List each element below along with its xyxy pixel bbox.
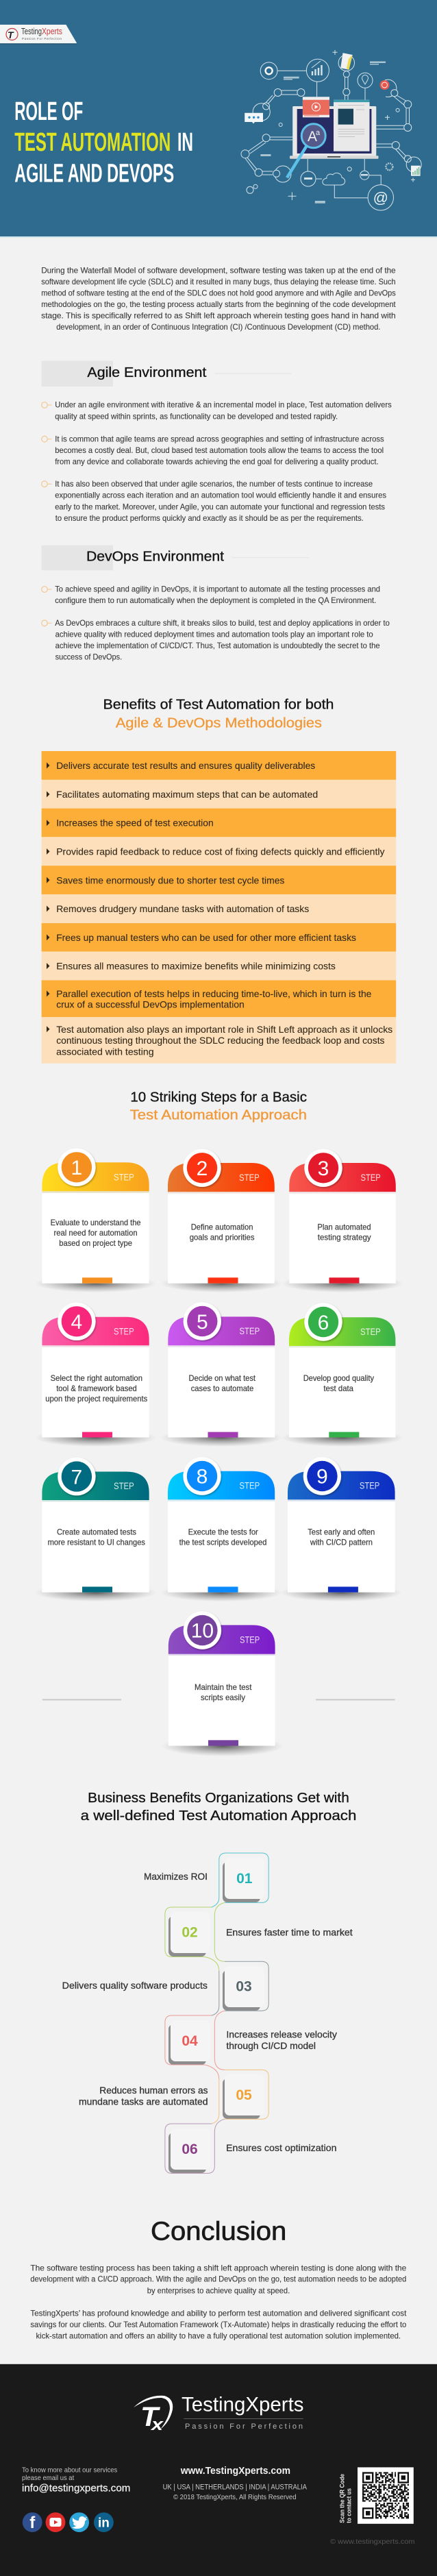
intro text: During the Waterfall Model of software development, software testing was taken up at the end of the [41,266,396,275]
step card 10: Maintain the test [195,1682,252,1692]
step card 3: testing strategy [318,1233,371,1242]
title: ROLE OF [14,97,83,126]
step card 8: 8 [197,1466,208,1488]
benefit 05: Reduces human errors as [99,2085,208,2096]
heading: business benefits: a well-defined Test Automation Approach [81,1808,356,1824]
panel: footer [0,2364,437,2576]
benefit 05: 05 [236,2087,252,2103]
row 6: Removes drudgery mundane tasks with automation of tasks [56,903,309,914]
benefit 06 [165,2119,337,2173]
heading: 10 steps: 10 Striking Steps for a Basic [130,1089,307,1105]
step card 9: Test early and often [308,1528,375,1537]
logo banner: Testing [21,26,42,36]
icon: facebook: f [29,2514,36,2532]
panel: business benefits ladder [62,1853,353,2173]
step card 4 [34,1303,156,1447]
benefit 05 [79,2070,269,2124]
conclusion paragraph 2: kick-start automation and offers an ability to have a fully operational test automation solution implemented. [36,2331,401,2341]
step card 7 [34,1458,156,1602]
row 5 [42,866,396,894]
bullet: agile 3: to ensure the product performs quickly and exactly as it should be as per the requirements. [55,513,364,523]
step card 2: 2 [197,1157,208,1180]
magnifier: a [316,129,321,137]
website and offices: www.TestingXperts.com [180,2466,290,2477]
bullet: devops 1: configure them to run automatically when the deployment is completed in the QA Environment. [55,596,376,605]
conclusion paragraph 1 [30,2263,407,2295]
footer logo: x [149,2416,164,2434]
row 10 [42,1017,396,1064]
step card 6 [282,1303,403,1447]
step card 2: STEP [239,1172,260,1183]
row 7: Frees up manual testers who can be used for other more efficient tasks [56,932,356,943]
row 1 [42,751,396,780]
benefit 03: Delivers quality software products [62,1980,208,1991]
document [334,100,370,151]
title: IN [177,128,193,157]
bullet: devops 2: success of DevOps. [55,652,122,662]
row 8: Ensures all measures to maximize benefits while minimizing costs [56,961,336,972]
bullet: agile 2 [42,434,384,466]
step card 8 [160,1457,282,1602]
heading: Agile Environment: Agile Environment [87,365,207,380]
bullet: agile 3 [42,479,386,523]
benefit 03: 03 [236,1979,252,1994]
step card 4: tool & framework based [56,1384,137,1393]
step card 8: Execute the tests for [188,1528,258,1537]
step card 3 [282,1149,403,1292]
step card 7: 7 [71,1466,82,1488]
row 2: Facilitates automating maximum steps that can be automated [56,789,318,800]
qr code [358,2467,414,2524]
step card 5: cases to automate [191,1384,254,1393]
heading: benefits: Agile & DevOps Methodologies [116,715,322,731]
row 10: associated with testing [56,1046,154,1057]
step card 7: more resistant to UI changes [48,1538,145,1547]
illustration: automation laptop network: @ [373,189,388,206]
step card 2: Define automation [191,1223,253,1232]
heading: 10 steps [130,1089,307,1123]
side rule: right [316,1699,395,1700]
website and offices: © 2018 TestingXperts, All Rights Reserved [173,2494,296,2501]
footer logo: Passion For Perfection [185,2422,303,2431]
step card 8: the test scripts developed [179,1538,266,1547]
contact text: please email us at [22,2474,74,2482]
conclusion paragraph 2: TestingXperts’ has profound knowledge and ability to perform test automation and delivered significant cost [30,2308,407,2318]
step card 4: STEP [114,1325,134,1336]
benefit 01: 01 [236,1871,253,1887]
intro text: development, in an order of Continuous Integration (CI) /Continuous Development (CD) method. [56,322,380,332]
contact text [22,2466,130,2494]
heading: Agile Environment [41,361,291,387]
step card 7: Create automated tests [57,1528,136,1537]
footer logo [134,2393,304,2434]
intro text: methodologies on the go, the testing process actually starts from the beginning of the code development [41,299,396,309]
magnifier [287,124,325,177]
row 4 [42,837,396,866]
step card 5: Decide on what test [189,1373,256,1383]
bullet: devops 1 [42,585,380,605]
step card 5: STEP [239,1325,260,1336]
step card 7: STEP [114,1480,134,1491]
heading: DevOps Environment: DevOps Environment [86,548,224,564]
step card 2: goals and priorities [190,1233,255,1242]
footer logo: TestingXperts [182,2393,304,2416]
title: AGILE AND DEVOPS [14,160,174,188]
bullet: agile 3: early to the market. Moreover, under Agile, you can automate your functional and regression tests [55,502,385,511]
step card 1: real need for automation [53,1228,138,1238]
contact text: info@testingxperts.com [22,2482,130,2494]
step card 10: 10 [191,1620,214,1643]
panel: hero header [0,0,437,238]
magnifier: A [308,129,317,145]
qr caption: Scan the QR Code [338,2474,345,2523]
step card 1 [34,1149,156,1292]
step card 10 [162,1611,284,1756]
row 6 [42,894,396,923]
icon: twitter [69,2512,89,2532]
step card 9: STEP [360,1480,379,1491]
laptop [290,106,378,159]
heading: business benefits [81,1790,356,1824]
step card 5: 5 [197,1311,208,1334]
benefit 02 [165,1902,353,1971]
benefit 04: through CI/CD model [226,2040,316,2051]
bullet: agile 3: It has also been observed that under agile scenarios, the number of tests continue to increase [55,479,373,489]
heading: benefits: Benefits of Test Automation for both [103,696,334,713]
row 2 [42,780,396,809]
row 10: Test automation also plays an important role in Shift Left approach as it unlocks [56,1024,392,1035]
illustration: automation laptop network [241,50,421,210]
step card 2 [160,1149,282,1292]
icon: linkedin [94,2512,114,2532]
logo banner: T [8,29,14,40]
logo banner [0,25,77,45]
bullet: devops 2: As DevOps embraces a culture shift, it breaks silos to build, test and deploy applications in order to [55,618,390,628]
benefit 04 [165,2011,337,2079]
benefit 04: Increases release velocity [226,2028,337,2039]
intro text: stage. This is specifically referred to as Shift left approach wherein testing goes hand in hand with [41,311,396,321]
qr caption: to contact us [345,2488,352,2523]
bullet: agile 3: exponentially across each iteration and an automation tool would efficiently handle it and ensures [55,491,386,500]
row 7 [42,923,396,952]
benefit 01: Maximizes ROI [144,1871,208,1882]
title: TEST AUTOMATION [14,128,171,157]
row 5: Saves time enormously due to shorter test cycle times [56,874,284,885]
intro text: method of software testing at the end of the SDLC does not hold good anymore and with Agile and DevOps [41,288,396,297]
icon: facebook [23,2512,42,2532]
row 10: continuous testing throughout the SDLC reducing the feedback loop and costs [56,1035,384,1046]
conclusion paragraph 1: by enterprises to achieve quality at speed. [147,2285,290,2295]
icon: linkedin: in [98,2516,110,2530]
benefit 03 [62,1961,269,2015]
step card 9 [280,1457,402,1602]
benefit 06: Ensures cost optimization [226,2142,337,2153]
panel: benefits list [42,751,396,1064]
step card 1: STEP [114,1172,134,1183]
footer watermark: © www.testingxperts.com [330,2538,415,2546]
step card 10: scripts easily [201,1693,245,1702]
heading: business benefits: Business Benefits Organizations Get with [88,1790,349,1806]
step card 3: Plan automated [317,1223,371,1232]
step card 9: 9 [316,1466,328,1488]
row 9: crux of a successful DevOps implementation [56,998,245,1009]
benefit 06: 06 [182,2142,198,2157]
conclusion paragraph 2: savings for our clients. Our Test Automation Framework (Tx-Automate) helps in drastically reducing the effort to [30,2320,407,2329]
bullet: devops 1: To achieve speed and agility in DevOps, it is important to automate all the testing processes and [55,585,380,594]
conclusion paragraph 2 [30,2308,407,2341]
step card 1: 1 [71,1157,82,1179]
intro text [41,266,396,332]
step card 1: based on project type [59,1238,132,1248]
conclusion paragraph 1: development with a CI/CD approach. With the agile and DevOps on the go, test automation needs to be adopted [30,2274,406,2284]
benefit 02: 02 [182,1924,198,1941]
website and offices: UK | USA | NETHERLANDS | INDIA | AUSTRALIA [163,2483,308,2491]
bullet: agile 1: quality at speed within sprints, as functionality can be developed and tested rapidly. [55,411,338,421]
step card 8: STEP [239,1480,260,1491]
step card 6: test data [323,1384,353,1393]
step card 6: 6 [318,1312,329,1334]
intro text: software development life cycle (SDLC) and it resulted in many bugs, thus delaying the release time. Such [41,277,396,286]
heading: benefits [103,696,334,731]
qr caption [338,2474,352,2523]
row 9 [42,980,396,1017]
step card 6: STEP [360,1326,381,1337]
heading: 10 steps: Test Automation Approach [130,1107,307,1123]
heading: conclusion: Conclusion [151,2217,286,2246]
step card 9: with CI/CD pattern [310,1538,373,1547]
icon: youtube [46,2512,65,2532]
benefit 04: 04 [182,2033,198,2049]
benefit 01 [144,1853,269,1907]
footer logo: T [140,2402,161,2432]
title [14,97,193,188]
row 1: Delivers accurate test results and ensures quality deliverables [56,760,315,771]
benefit 05: mundane tasks are automated [79,2096,208,2107]
bullet: devops 2: achieve quality with reduced deployment times and automation tools play an important role to [55,629,373,639]
benefit 02: Ensures faster time to market [226,1926,353,1937]
bullet: agile 2: becomes a costly deal. But, cloud based test automation tools allow the teams to access the tool [55,445,384,455]
step card 3: 3 [318,1157,329,1180]
row 3 [42,809,396,837]
row 9: Parallel execution of tests helps in reducing time-to-live, which in turn is the [56,988,372,999]
step card 3: STEP [360,1172,381,1183]
step card 10: STEP [240,1634,260,1645]
contact text: To know more about our services [22,2466,117,2474]
bullet: agile 2: It is common that agile teams are spread across geographies and setting of infrastructure across [55,434,384,443]
row 4: Provides rapid feedback to reduce cost of fixing defects quickly and efficiently [56,846,384,857]
logo banner: Xperts [42,26,62,36]
bullet: devops 2 [42,618,390,662]
heading: DevOps Environment [41,545,309,570]
side rule: left [42,1699,121,1700]
bullet: agile 1: Under an agile environment with iterative & an incremental model in place, Test automation delivers [55,400,392,410]
row 3: Increases the speed of test execution [56,818,214,829]
bullet: agile 2: from any device and collaborate towards achieving the end goal for delivering a quality product. [55,456,379,466]
website and offices [163,2466,308,2501]
step card 6: Develop good quality [303,1373,374,1383]
conclusion paragraph 1: The software testing process has been taking a shift left approach wherein testing is done along with the [30,2263,407,2272]
row 8 [42,952,396,980]
step card 4: upon the project requirements [45,1394,147,1403]
step card 4: 4 [71,1311,82,1334]
step card 5 [160,1302,282,1447]
video player [303,97,329,117]
bullet: agile 1 [42,400,392,421]
step card 1: Evaluate to understand the [51,1218,141,1227]
step card 4: Select the right automation [51,1373,142,1383]
logo banner: Passion For Perfection [22,37,62,40]
bullet: devops 2: achieve the implementation of CI/CD/CT. Thus, Test automation is undoubtedly the secret to the [55,641,380,650]
